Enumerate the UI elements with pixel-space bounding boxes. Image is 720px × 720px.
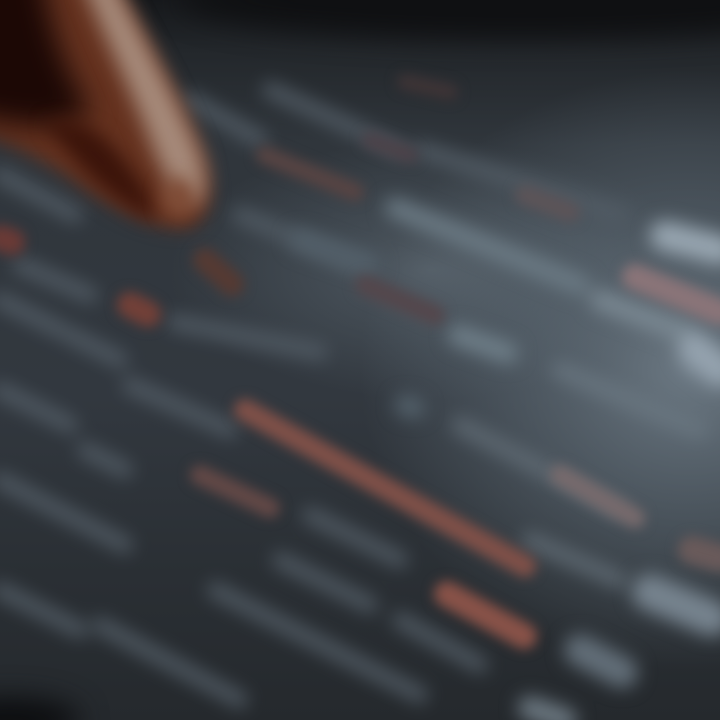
muted red bar upper right xyxy=(525,195,570,212)
fingertip warm tone xyxy=(162,178,194,218)
muted red bar top centre xyxy=(405,82,450,92)
muted red bar far right xyxy=(692,550,720,558)
finger xyxy=(0,0,210,228)
light highlighted text rows xyxy=(300,208,720,720)
red highlighted text rows xyxy=(0,82,720,636)
finger dark left side xyxy=(0,0,90,125)
muted red bar top xyxy=(370,140,410,155)
short red bar lower left xyxy=(200,475,270,508)
finger lit edge xyxy=(78,0,205,205)
finger body xyxy=(0,0,210,228)
red dot xyxy=(130,305,148,314)
short red bar lower right xyxy=(447,594,524,636)
long red bar xyxy=(245,410,525,566)
finger underside shadow xyxy=(45,120,155,220)
muted red bar centre xyxy=(365,285,435,315)
muted red bar upper xyxy=(265,155,355,192)
muted red bar under finger xyxy=(205,260,232,284)
red bar right edge xyxy=(635,277,720,312)
muted red bar lower right xyxy=(560,475,635,518)
red dot left edge xyxy=(0,238,12,242)
